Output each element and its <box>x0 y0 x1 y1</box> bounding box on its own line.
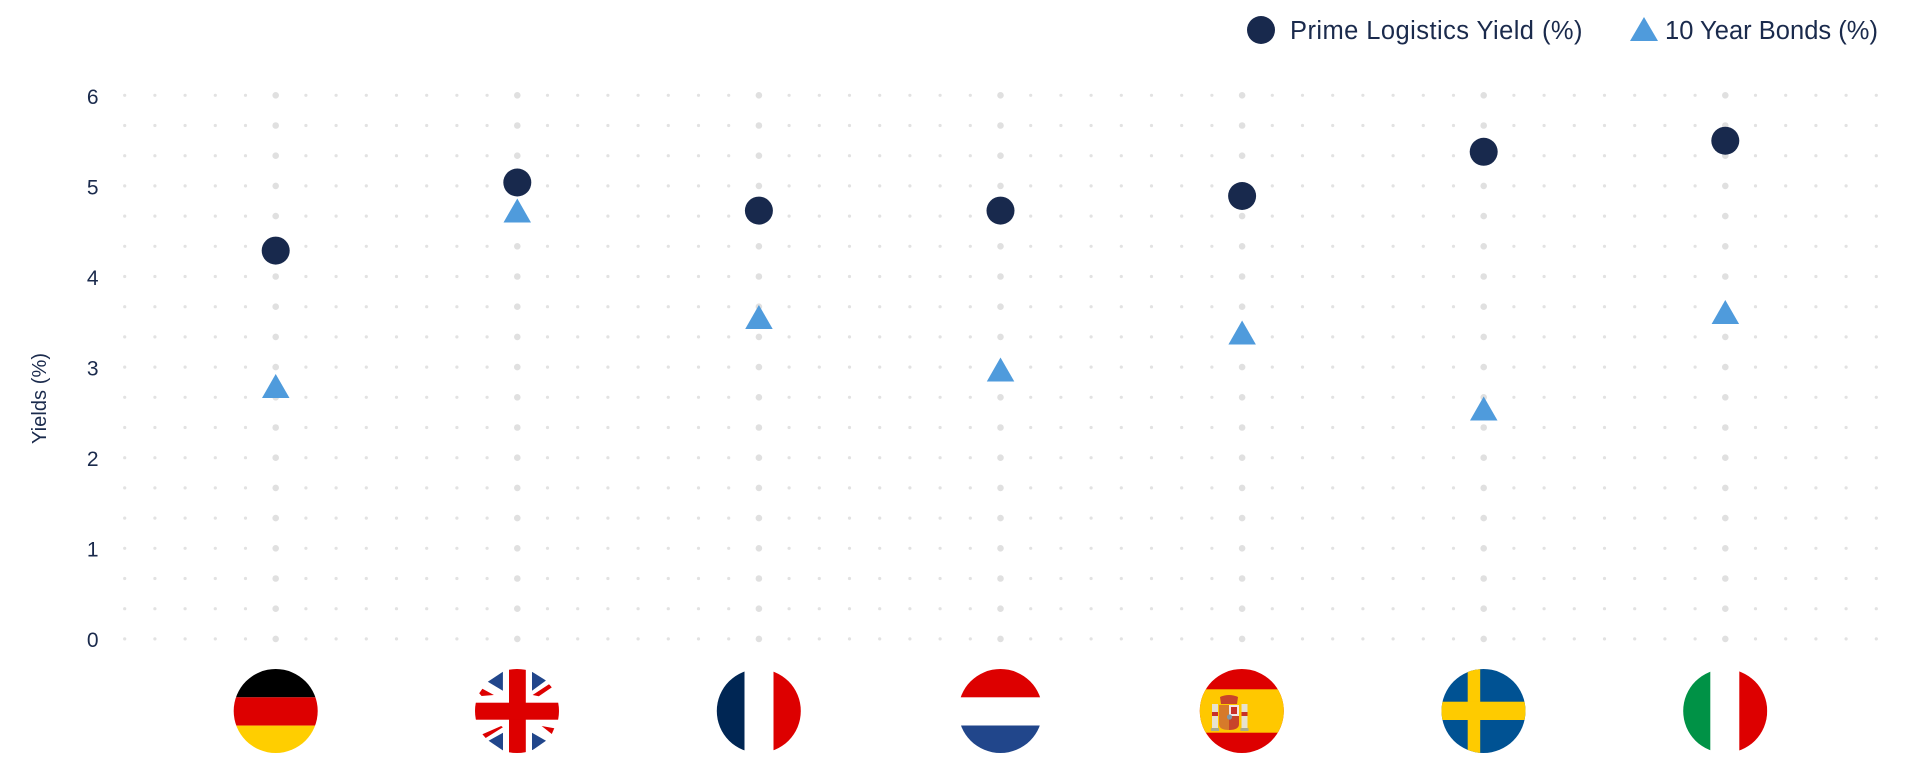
dot grid background <box>125 95 1880 642</box>
y axis tick labels: 2 <box>87 448 99 471</box>
flag: Germany <box>230 669 322 754</box>
prime logistics yield markers <box>262 127 1739 265</box>
marker: Netherlands yield <box>986 197 1014 225</box>
flag: France <box>716 669 802 753</box>
Spanish coat of arms <box>1211 695 1248 731</box>
flag: Netherlands <box>958 669 1043 754</box>
marker: Netherlands bond <box>987 358 1014 382</box>
flag: Spain <box>1199 669 1284 753</box>
y axis tick labels: 0 <box>87 629 99 652</box>
legend marker: prime logistics yield <box>1247 16 1275 44</box>
flag: United Kingdom <box>475 669 559 753</box>
y axis tick labels: 6 <box>87 86 99 109</box>
marker: Germany bond <box>262 374 290 398</box>
flag: Italy <box>1683 669 1767 753</box>
legend <box>1247 16 1878 45</box>
y axis tick labels: 4 <box>87 267 99 290</box>
marker: Germany yield <box>262 237 290 265</box>
marker: Italy bond <box>1712 300 1739 324</box>
legend label: prime logistics yield: Prime Logistics Yield (%) <box>1290 17 1582 45</box>
y axis tick labels: 3 <box>87 358 99 380</box>
marker: Spain yield <box>1228 182 1256 210</box>
legend marker: 10 year bonds <box>1630 17 1658 41</box>
y axis tick labels: 5 <box>87 177 99 200</box>
marker: France yield <box>745 197 773 225</box>
legend label: 10 year bonds: 10 Year Bonds (%) <box>1665 17 1878 45</box>
marker: Sweden yield <box>1470 138 1498 166</box>
y axis tick labels: 1 <box>87 538 99 562</box>
flag: Sweden <box>1441 669 1526 753</box>
marker: UK yield <box>503 168 531 196</box>
y axis title: Yields (%) <box>29 353 51 444</box>
10 year bond markers <box>262 198 1739 420</box>
marker: Italy yield <box>1711 127 1739 155</box>
y axis tick labels <box>87 86 99 652</box>
marker: Spain bond <box>1228 320 1256 344</box>
marker: Sweden bond <box>1470 396 1498 420</box>
marker: France bond <box>745 305 773 329</box>
marker: UK bond <box>504 198 531 222</box>
